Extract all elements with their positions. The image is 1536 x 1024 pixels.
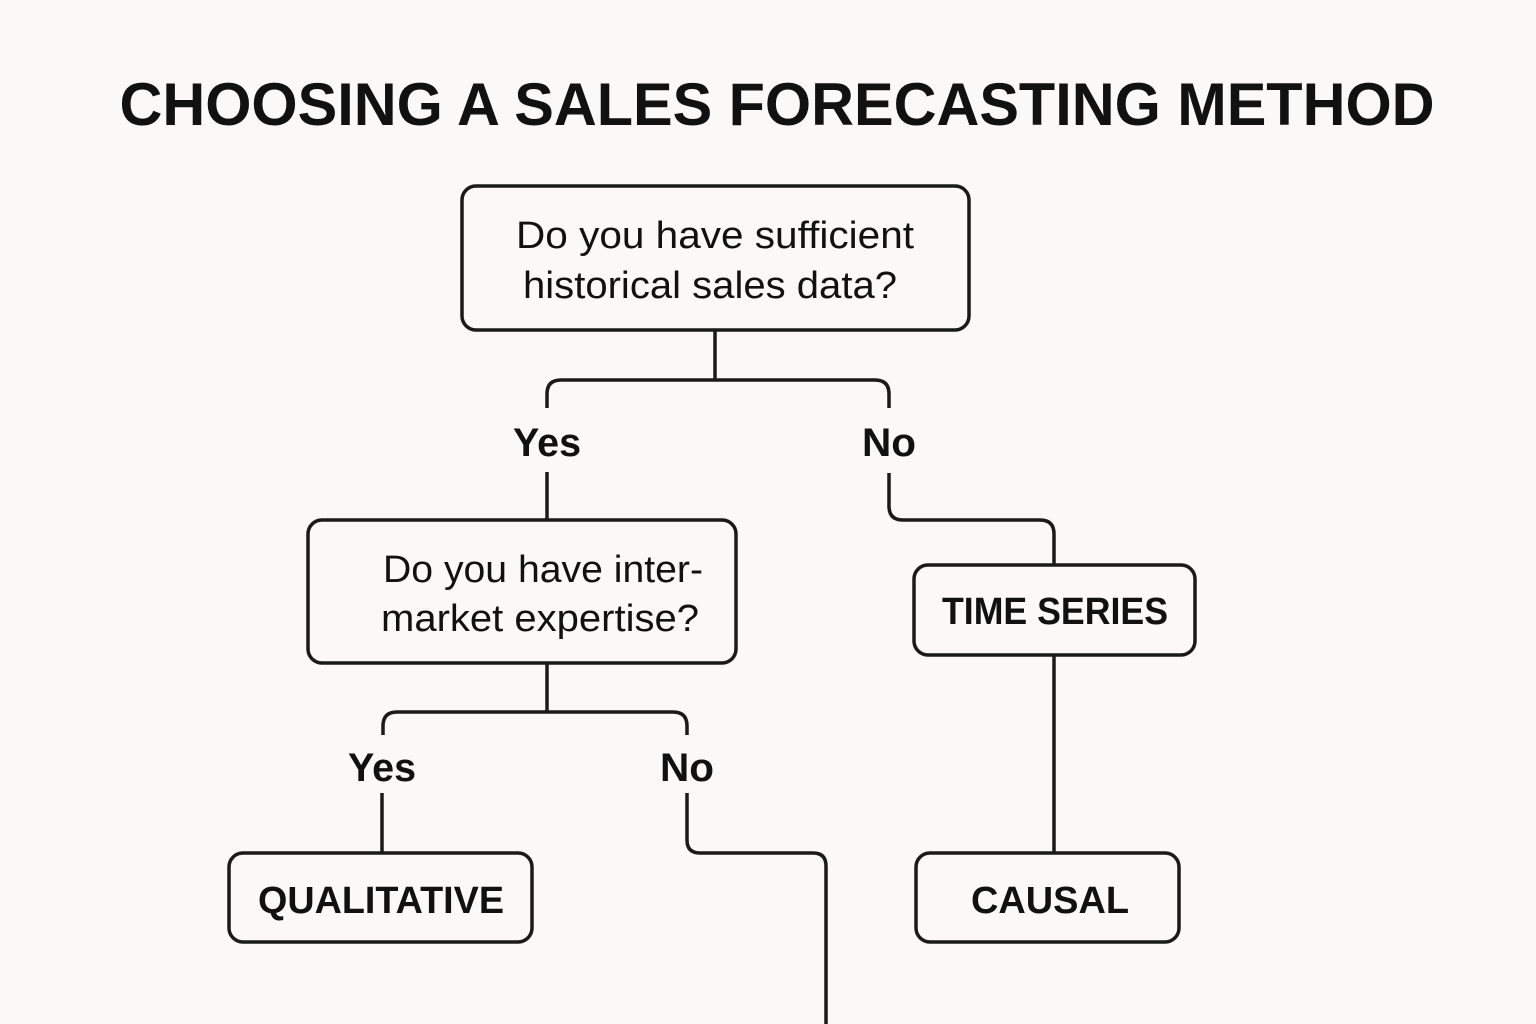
connector: yes to expertise bbox=[545, 472, 549, 520]
box: TIME SERIES: TIME SERIES bbox=[942, 591, 1168, 633]
box: TIME SERIES bbox=[914, 565, 1195, 655]
label: Yes (second): Yes bbox=[348, 746, 416, 790]
connector: second split bbox=[383, 663, 687, 735]
connector: time series to causal bbox=[1052, 655, 1056, 853]
connector: first split bbox=[547, 330, 889, 408]
connector: yes to qualitative bbox=[380, 793, 384, 853]
box: inter-market expertise question: market expertise? bbox=[381, 598, 699, 640]
box: QUALITATIVE bbox=[229, 853, 532, 942]
connector: no down off page bbox=[687, 793, 826, 1024]
box: inter-market expertise question: Do you have inter- bbox=[383, 549, 703, 591]
box: CAUSAL: CAUSAL bbox=[971, 880, 1129, 922]
box: sufficient historical data question: Do you have sufficient bbox=[516, 215, 914, 257]
label: Yes (first): Yes bbox=[513, 421, 581, 465]
connector: no to time series bbox=[889, 473, 1054, 565]
box: sufficient historical data question: historical sales data? bbox=[523, 265, 897, 307]
box: QUALITATIVE: QUALITATIVE bbox=[258, 880, 504, 922]
label: No (first): No bbox=[862, 421, 916, 465]
box: inter-market expertise question bbox=[308, 520, 736, 663]
box: CAUSAL bbox=[916, 853, 1179, 942]
box: sufficient historical data question bbox=[462, 186, 969, 330]
title: CHOOSING A SALES FORECASTING METHOD bbox=[120, 71, 1434, 138]
label: No (second): No bbox=[660, 746, 714, 790]
